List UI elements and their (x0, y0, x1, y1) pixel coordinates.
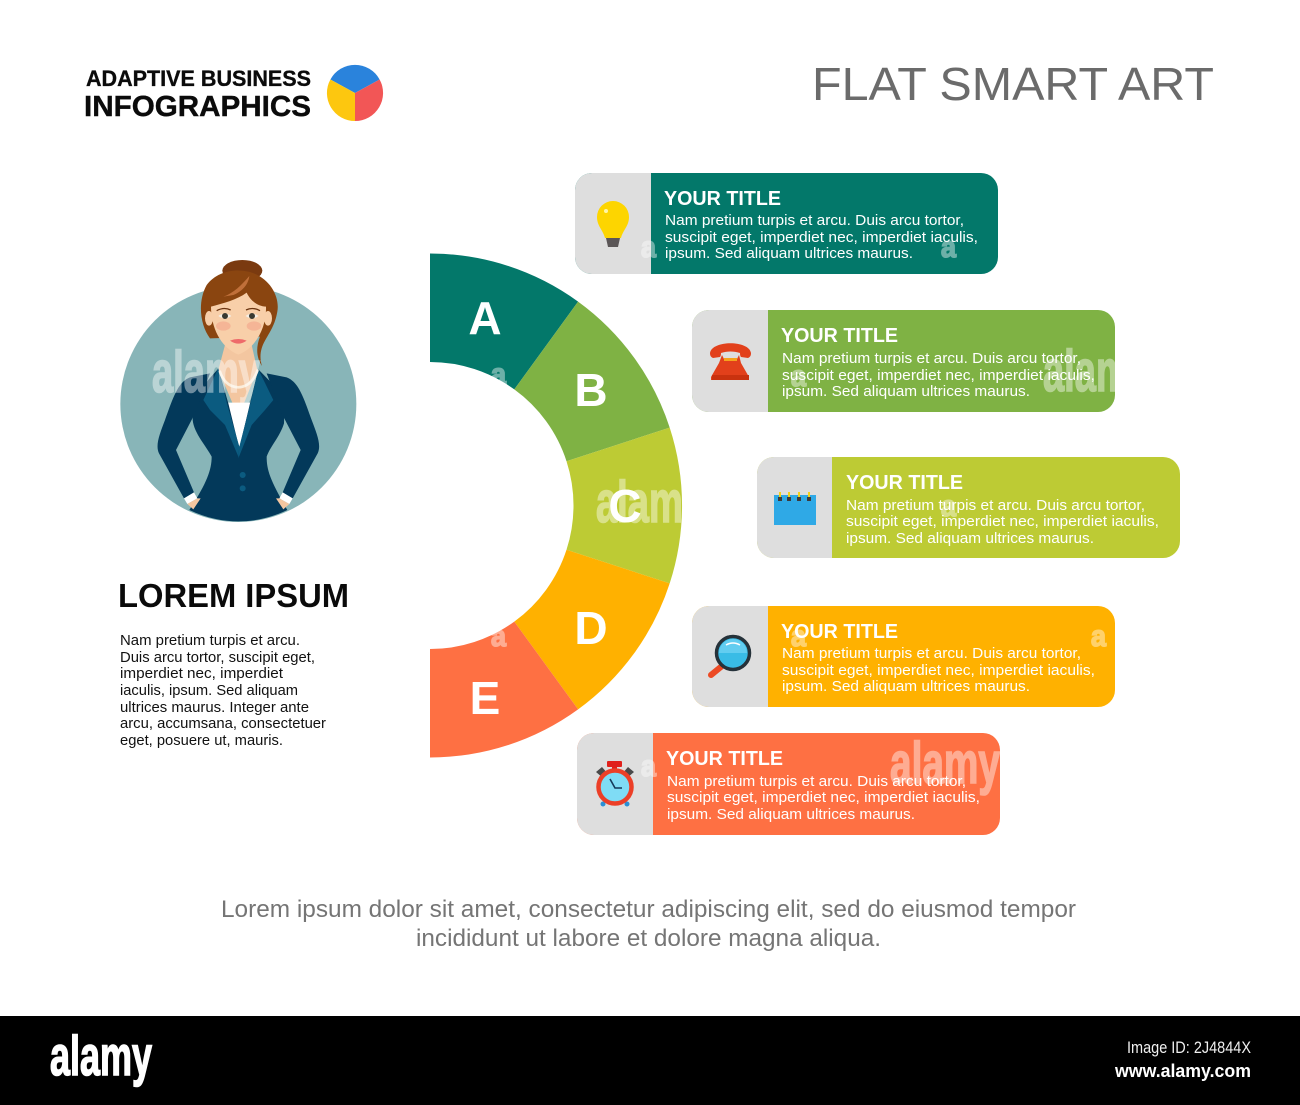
hair back (201, 271, 278, 366)
main title: FLAT SMART ART (812, 58, 1214, 110)
buttons (240, 472, 246, 491)
watermarks: alamy (1043, 339, 1151, 404)
jacket torso (189, 369, 287, 521)
panel E text: Nam pretium turpis et arcu. Duis arcu tortor, (667, 774, 966, 790)
panel E text: suscipit eget, imperdiet nec, imperdiet iaculis, (667, 790, 980, 806)
left paragraph: eget, posuere ut, mauris. (120, 733, 283, 749)
panel A text: YOUR TITLE (664, 188, 781, 210)
segment B: B (574, 364, 608, 416)
footer caption: incididunt ut labore et dolore magna aliqua. (416, 925, 881, 952)
watermarks: alamy (152, 340, 260, 405)
panel: B (692, 310, 1115, 412)
heading: lorem ipsum: LOREM IPSUM (118, 577, 349, 614)
brows (217, 308, 260, 311)
portrait: businesswoman in circle (120, 260, 356, 522)
right arm (267, 373, 319, 498)
watermarks: a (491, 358, 506, 391)
neck (218, 345, 257, 407)
panel B text (781, 325, 1095, 400)
icon: logo pie (327, 65, 383, 121)
panel: D (692, 606, 1115, 707)
left paragraph: imperdiet nec, imperdiet (120, 666, 283, 682)
panel: A (575, 173, 998, 274)
face (211, 293, 266, 355)
panel E text: ipsum. Sed aliquam ultrices maurus. (667, 807, 915, 823)
segment B (514, 302, 670, 461)
footer caption: Lorem ipsum dolor sit amet, consectetur adipiscing elit, sed do eiusmod tempor (221, 896, 1076, 923)
panel C text (846, 472, 1159, 547)
icon: light bulb (597, 201, 629, 247)
panel D text: suscipit eget, imperdiet nec, imperdiet iaculis, (782, 663, 1095, 679)
panel: C (757, 457, 1180, 558)
segment D: D (574, 602, 608, 654)
panel B text: ipsum. Sed aliquam ultrices maurus. (782, 384, 1030, 400)
icon: calendar (774, 492, 816, 525)
panel E text: YOUR TITLE (666, 748, 783, 770)
panel C text: suscipit eget, imperdiet nec, imperdiet iaculis, (846, 514, 1159, 530)
logo text line 2: INFOGRAPHICS (84, 91, 311, 123)
shirt (225, 403, 252, 447)
alamy logo: alamy (50, 1024, 152, 1087)
panel D text: YOUR TITLE (781, 621, 898, 643)
logo text line 1: ADAPTIVE BUSINESS (86, 66, 311, 91)
segment E: E (470, 672, 500, 724)
cheeks (216, 321, 261, 331)
panel: E (577, 733, 1000, 835)
panel B text: suscipit eget, imperdiet nec, imperdiet iaculis, (782, 368, 1095, 384)
left paragraph: Duis arcu tortor, suscipit eget, (120, 650, 315, 666)
left paragraph: arcu, accumsana, consectetuer (120, 716, 326, 732)
footer band (0, 1016, 1300, 1105)
ears (205, 311, 272, 326)
left arm (158, 373, 210, 498)
watermarks: a (1091, 620, 1106, 653)
panel D text (781, 621, 1095, 695)
watermarks: a (941, 231, 956, 264)
cuffs and hands (184, 492, 293, 504)
watermarks: a (791, 360, 806, 393)
panel A text: suscipit eget, imperdiet nec, imperdiet iaculis, (665, 230, 978, 246)
watermarks: a (491, 620, 506, 653)
lapels (203, 368, 273, 458)
left paragraph: iaculis, ipsum. Sed aliquam (120, 683, 298, 699)
watermarks: a (791, 620, 806, 653)
segment C: C (608, 480, 642, 532)
panel E text (666, 748, 980, 823)
segment A (430, 254, 578, 389)
panel C text: YOUR TITLE (846, 472, 963, 494)
panel C text: ipsum. Sed aliquam ultrices maurus. (846, 531, 1094, 547)
eyes (218, 314, 259, 318)
segment C: alamy (596, 470, 704, 535)
watermarks: a (641, 750, 656, 783)
logo: adaptive business infographics (84, 65, 383, 123)
icon: alarm clock (596, 761, 634, 806)
watermarks (152, 231, 1151, 796)
segment A: A (468, 292, 502, 344)
semicircle chart (430, 254, 704, 758)
left paragraph: Nam pretium turpis et arcu. (120, 633, 300, 649)
segment E (430, 622, 578, 758)
panel A text: Nam pretium turpis et arcu. Duis arcu tortor, (665, 213, 964, 229)
panel A text (664, 188, 978, 262)
watermarks: a (641, 231, 656, 264)
panel D text: Nam pretium turpis et arcu. Duis arcu tortor, (782, 646, 1081, 662)
pearl necklace (220, 371, 257, 387)
segment C (566, 428, 682, 584)
watermarks: alamy (890, 731, 1000, 796)
watermarks: a (941, 490, 956, 523)
panel D text: ipsum. Sed aliquam ultrices maurus. (782, 679, 1030, 695)
icon: telephone (710, 343, 751, 380)
panel C text: Nam pretium turpis et arcu. Duis arcu tortor, (846, 498, 1145, 514)
icon: magnifier (711, 636, 750, 675)
left paragraph (120, 633, 326, 749)
panel A text: ipsum. Sed aliquam ultrices maurus. (665, 246, 913, 262)
left paragraph: ultrices maurus. Integer ante (120, 700, 309, 716)
segment D (514, 550, 670, 709)
lips (230, 339, 247, 344)
website: www.alamy.com (1114, 1061, 1251, 1081)
hair bun (222, 260, 262, 281)
image id: Image ID: 2J4844X (1127, 1038, 1251, 1057)
panel B text: YOUR TITLE (781, 325, 898, 347)
footer caption (221, 896, 1076, 952)
panel B text: Nam pretium turpis et arcu. Duis arcu tortor, (782, 351, 1081, 367)
hair highlight (223, 276, 249, 297)
